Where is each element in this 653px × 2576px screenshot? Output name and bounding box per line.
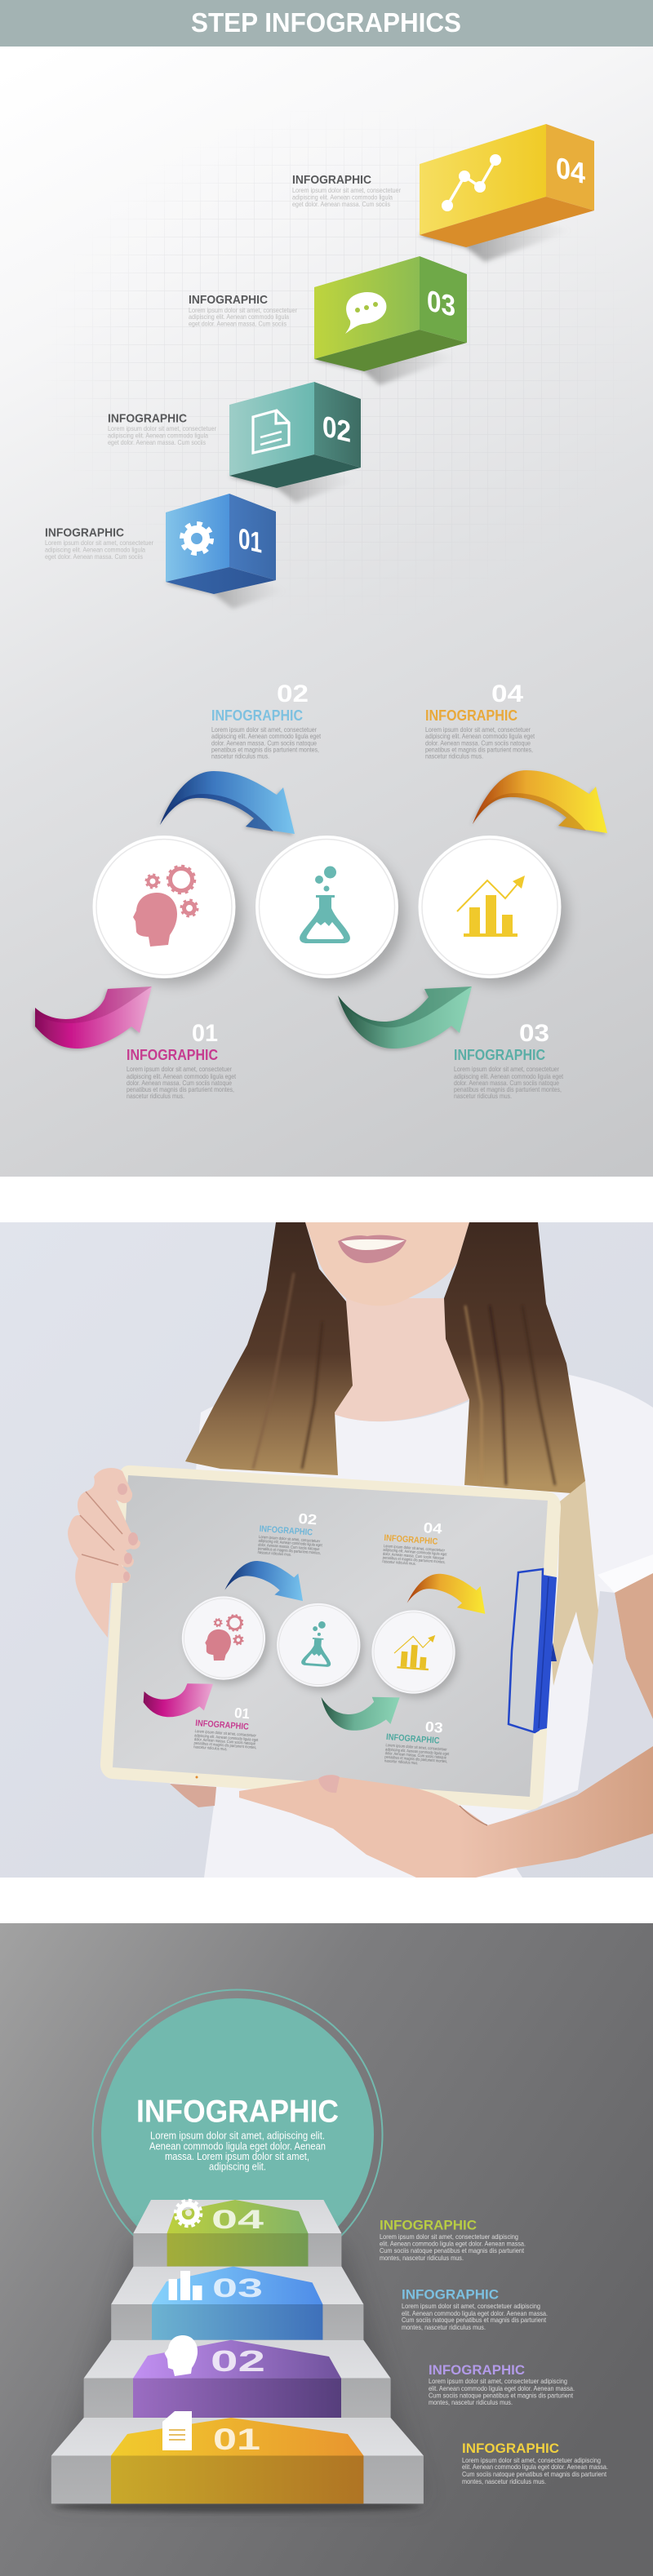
mini labels: penatibus et magnis dis parturient montes,	[258, 1546, 321, 1556]
cube 04 text: INFOGRAPHIC	[292, 173, 371, 187]
step 02 label	[211, 681, 322, 760]
label 03: INFOGRAPHIC	[402, 2286, 499, 2303]
mini labels: dolor. Aenean massa. Cum sociis natoque	[194, 1737, 256, 1746]
mini labels: Lorem ipsum dolor sit amet, consectetuer	[259, 1535, 321, 1544]
teal circle with headline	[93, 1989, 382, 2280]
mini labels: 01	[233, 1705, 251, 1722]
label 04: Lorem ipsum dolor sit amet, consectetuer adipiscing	[380, 2232, 518, 2241]
arrow: blue	[160, 771, 295, 834]
label 03: Cum sociis natoque penatibus et magnis dis parturient	[402, 2316, 547, 2324]
step 01 label: nascetur ridiculus mus.	[127, 1092, 184, 1100]
circle 3 with bar chart icon	[418, 836, 568, 985]
label 04: elit. Aenean commodo ligula eget dolor. Aenean massa.	[380, 2239, 526, 2247]
label 04	[380, 2218, 526, 2262]
step 01	[51, 2411, 424, 2503]
mini labels: INFOGRAPHIC	[386, 1732, 440, 1746]
cube 01 text	[45, 525, 153, 561]
step 02 label: INFOGRAPHIC	[211, 707, 303, 724]
step cube 03	[314, 256, 467, 385]
step 03 label: adipiscing elit. Aenean commodo ligula eget	[454, 1072, 564, 1080]
label 04: montes, nascetur ridiculus mus.	[380, 2254, 464, 2262]
label 01: INFOGRAPHIC	[462, 2441, 559, 2456]
circle 2 with flask icon	[255, 836, 405, 985]
mini infographic on clipboard	[140, 1500, 491, 1770]
step cube 04: 04	[556, 150, 586, 190]
step 01 label: Lorem ipsum dolor sit amet, consectetuer	[127, 1065, 232, 1073]
icon: document	[253, 410, 289, 453]
step cube 02: 02	[322, 409, 351, 449]
icon: bars	[169, 2271, 202, 2300]
label 03	[402, 2286, 548, 2331]
mini labels: adipiscing elit. Aenean commodo ligula eget	[385, 1747, 450, 1757]
icon: document	[162, 2411, 192, 2450]
label 02: montes, nascetur ridiculus mus.	[429, 2398, 513, 2406]
mini labels: adipiscing elit. Aenean commodo ligula eget	[258, 1539, 322, 1548]
step cube 01	[166, 494, 286, 609]
step 02	[84, 2335, 391, 2418]
step 01 label: 01	[192, 1020, 218, 1047]
step 03: 03	[212, 2273, 263, 2303]
panel: light background of step cubes and circles	[0, 47, 653, 1177]
mini labels	[193, 1513, 449, 1764]
clipboard	[100, 1465, 561, 1810]
icon: line chart	[442, 154, 501, 211]
title: STEP INFOGRAPHICS	[191, 7, 461, 38]
mini labels: INFOGRAPHIC	[195, 1718, 249, 1732]
step 02 label: adipiscing elit. Aenean commodo ligula eget	[211, 732, 322, 740]
label 02: INFOGRAPHIC	[429, 2362, 525, 2378]
mini labels: 02	[298, 1510, 318, 1527]
label 02: elit. Aenean commodo ligula eget dolor. Aenean massa.	[429, 2384, 575, 2392]
step 04 label: penatibus et magnis dis parturient montes,	[425, 746, 533, 754]
mini circles	[179, 1594, 462, 1700]
blue clip	[509, 1569, 557, 1732]
label 02	[429, 2362, 575, 2406]
step 04 label: nascetur ridiculus mus.	[425, 752, 483, 760]
mini labels: 03	[424, 1718, 444, 1736]
mini icon: bar chart	[393, 1632, 435, 1671]
mini icon: head and gears	[204, 1613, 245, 1663]
step 03 label	[454, 1020, 564, 1100]
stair shadows	[51, 2240, 424, 2512]
step cube 01: 01	[238, 521, 262, 560]
cube 01 text: Lorem ipsum dolor sit amet, consectetuer	[45, 539, 153, 547]
step 04: 04	[211, 2205, 264, 2234]
headline: INFOGRAPHIC	[136, 2094, 339, 2130]
step 01 label: INFOGRAPHIC	[127, 1046, 218, 1063]
step 04 label: INFOGRAPHIC	[425, 707, 518, 724]
cube 04 text: Lorem ipsum dolor sit amet, consectetuer	[292, 186, 401, 194]
step 04 label: Lorem ipsum dolor sit amet, consectetuer	[425, 725, 531, 734]
step 02 label: Lorem ipsum dolor sit amet, consectetuer	[211, 725, 317, 734]
mini labels: nascetur ridiculus mus.	[382, 1559, 416, 1567]
mini labels: adipiscing elit. Aenean commodo ligula eget	[383, 1548, 447, 1557]
panel: dark background with stairs	[0, 1923, 653, 2576]
label 04: INFOGRAPHIC	[380, 2218, 477, 2232]
mini labels: Lorem ipsum dolor sit amet, consectetuer	[383, 1544, 445, 1554]
step 02 label: nascetur ridiculus mus.	[211, 752, 269, 760]
wrist behind board	[170, 1784, 216, 1807]
mini labels: nascetur ridiculus mus.	[257, 1550, 291, 1558]
mini icon: flask	[301, 1621, 331, 1667]
neck	[334, 1298, 469, 1421]
cube 03 text: eget dolor. Aenean massa. Cum sociis	[189, 320, 287, 328]
step 03 label: INFOGRAPHIC	[454, 1046, 545, 1063]
cube 01 text: adipiscing elit. Aenean commodo ligula	[45, 545, 145, 553]
step 03	[111, 2267, 363, 2340]
lips	[338, 1235, 406, 1263]
body text	[149, 2130, 326, 2172]
mini arrows	[142, 1553, 488, 1740]
step cube 03: 03	[427, 283, 455, 323]
cube 01 text: INFOGRAPHIC	[45, 525, 124, 540]
right sleeve edge	[597, 1554, 653, 1593]
cube 02 text: eget dolor. Aenean massa. Cum sociis	[108, 438, 206, 446]
body text: massa. Lorem ipsum dolor sit amet,	[165, 2150, 309, 2162]
mini labels: 04	[423, 1519, 443, 1537]
hair right	[444, 1222, 585, 1493]
mini labels: adipiscing elit. Aenean commodo ligula eget	[194, 1733, 259, 1743]
body text: Aenean commodo ligula eget dolor. Aenean	[149, 2139, 326, 2153]
step 04 label	[425, 681, 535, 760]
circle process diagram	[35, 681, 607, 1100]
arrow: orange	[473, 770, 607, 833]
step 04 label: 04	[491, 681, 523, 707]
step 04	[133, 2200, 341, 2267]
step 03 label: Lorem ipsum dolor sit amet, consectetuer	[454, 1065, 559, 1073]
step 03 label: dolor. Aenean massa. Cum sociis natoque	[454, 1079, 559, 1087]
icon: gear	[175, 2200, 202, 2226]
label 01: elit. Aenean commodo ligula eget dolor. Aenean massa.	[462, 2463, 608, 2471]
label 01: Lorem ipsum dolor sit amet, consectetuer adipiscing	[462, 2456, 601, 2464]
mini labels: dolor. Aenean massa. Cum sociis natoque	[383, 1552, 445, 1561]
mini labels: dolor. Aenean massa. Cum sociis natoque	[384, 1751, 446, 1761]
step cube 02	[229, 382, 361, 503]
step 03 label: penatibus et magnis dis parturient montes,	[454, 1085, 562, 1093]
mini labels: Lorem ipsum dolor sit amet, consectetuer	[194, 1729, 256, 1739]
arrow: pink	[35, 987, 152, 1049]
mini labels: nascetur ridiculus mus.	[384, 1758, 419, 1766]
step 01 label: penatibus et magnis dis parturient montes,	[127, 1085, 234, 1093]
lower hand and forearm	[239, 1746, 653, 1878]
background gap between shirt and arm	[577, 1593, 653, 1795]
cube 04 text	[292, 173, 401, 208]
step 03 label: 03	[519, 1020, 549, 1047]
mini labels: nascetur ridiculus mus.	[193, 1745, 228, 1752]
woman illustration	[170, 1222, 653, 1878]
step 03 label: nascetur ridiculus mus.	[454, 1092, 512, 1100]
label 03: elit. Aenean commodo ligula eget dolor. Aenean massa.	[402, 2309, 548, 2317]
mini labels: penatibus et magnis dis parturient montes,	[382, 1555, 446, 1565]
header banner	[0, 0, 653, 47]
mini labels: INFOGRAPHIC	[259, 1524, 313, 1538]
mini labels: penatibus et magnis dis parturient montes,	[384, 1755, 448, 1764]
label 03: montes, nascetur ridiculus mus.	[402, 2323, 486, 2331]
icon: speech bubble	[345, 292, 386, 334]
label 01	[462, 2441, 608, 2485]
arrow: green	[338, 987, 472, 1049]
cube 03 text: adipiscing elit. Aenean commodo ligula	[189, 313, 289, 321]
step cube 04	[420, 124, 594, 262]
step 01 label	[127, 1020, 237, 1100]
blond hair ends	[552, 1481, 598, 1686]
white t-shirt	[170, 1369, 653, 1878]
step 01 label: adipiscing elit. Aenean commodo ligula eget	[127, 1072, 237, 1080]
label 01: montes, nascetur ridiculus mus.	[462, 2477, 546, 2485]
step 02 label: 02	[277, 681, 309, 707]
step 02 label: dolor. Aenean massa. Cum sociis natoque	[211, 739, 317, 747]
icon: head	[165, 2335, 198, 2376]
body text: adipiscing elit.	[209, 2161, 266, 2172]
mini labels: dolor. Aenean massa. Cum sociis natoque	[258, 1543, 320, 1552]
step 04 label: dolor. Aenean massa. Cum sociis natoque	[425, 739, 531, 747]
cube 04 text: eget dolor. Aenean massa. Cum sociis	[292, 200, 390, 208]
step 01: 01	[213, 2423, 260, 2456]
step 01 label: dolor. Aenean massa. Cum sociis natoque	[127, 1079, 232, 1087]
hair strands	[253, 1273, 555, 1485]
cube 04 text: adipiscing elit. Aenean commodo ligula	[292, 193, 393, 201]
hair left	[185, 1222, 353, 1475]
cube 02 text: INFOGRAPHIC	[108, 411, 187, 426]
label 03: Lorem ipsum dolor sit amet, consectetuer adipiscing	[402, 2302, 540, 2310]
label 02: Lorem ipsum dolor sit amet, consectetuer adipiscing	[429, 2377, 567, 2385]
panel: photo of woman holding clipboard	[0, 1222, 653, 1878]
label 01: Cum sociis natoque penatibus et magnis dis parturient	[462, 2470, 607, 2478]
step 04 label: adipiscing elit. Aenean commodo ligula eget	[425, 732, 535, 740]
circle 1 with head and gears icon	[93, 836, 242, 985]
step 02 label: penatibus et magnis dis parturient montes,	[211, 746, 319, 754]
mini labels: Lorem ipsum dolor sit amet, consectetuer	[385, 1743, 447, 1753]
label 04: Cum sociis natoque penatibus et magnis dis parturient	[380, 2246, 525, 2255]
label 02: Cum sociis natoque penatibus et magnis dis parturient	[429, 2391, 574, 2399]
cube 03 text: INFOGRAPHIC	[189, 293, 268, 307]
cube 02 text	[108, 411, 216, 446]
mini labels: penatibus et magnis dis parturient montes,	[193, 1741, 257, 1750]
bare upper arm	[615, 1573, 653, 1719]
icon: gear	[182, 524, 211, 553]
cube 02 text: Lorem ipsum dolor sit amet, consectetuer	[108, 424, 216, 432]
face	[305, 1222, 469, 1306]
left hand	[68, 1468, 140, 1638]
cube 03 text	[189, 293, 297, 328]
mini labels: INFOGRAPHIC	[384, 1533, 438, 1547]
cube 03 text: Lorem ipsum dolor sit amet, consectetuer	[189, 306, 297, 314]
teeth	[341, 1239, 405, 1250]
body text: Lorem ipsum dolor sit amet, adipiscing elit.	[150, 2130, 325, 2141]
cube 01 text: eget dolor. Aenean massa. Cum sociis	[45, 552, 143, 561]
cube 02 text: adipiscing elit. Aenean commodo ligula	[108, 431, 208, 439]
stairs	[51, 2200, 424, 2512]
step 02: 02	[211, 2344, 265, 2378]
